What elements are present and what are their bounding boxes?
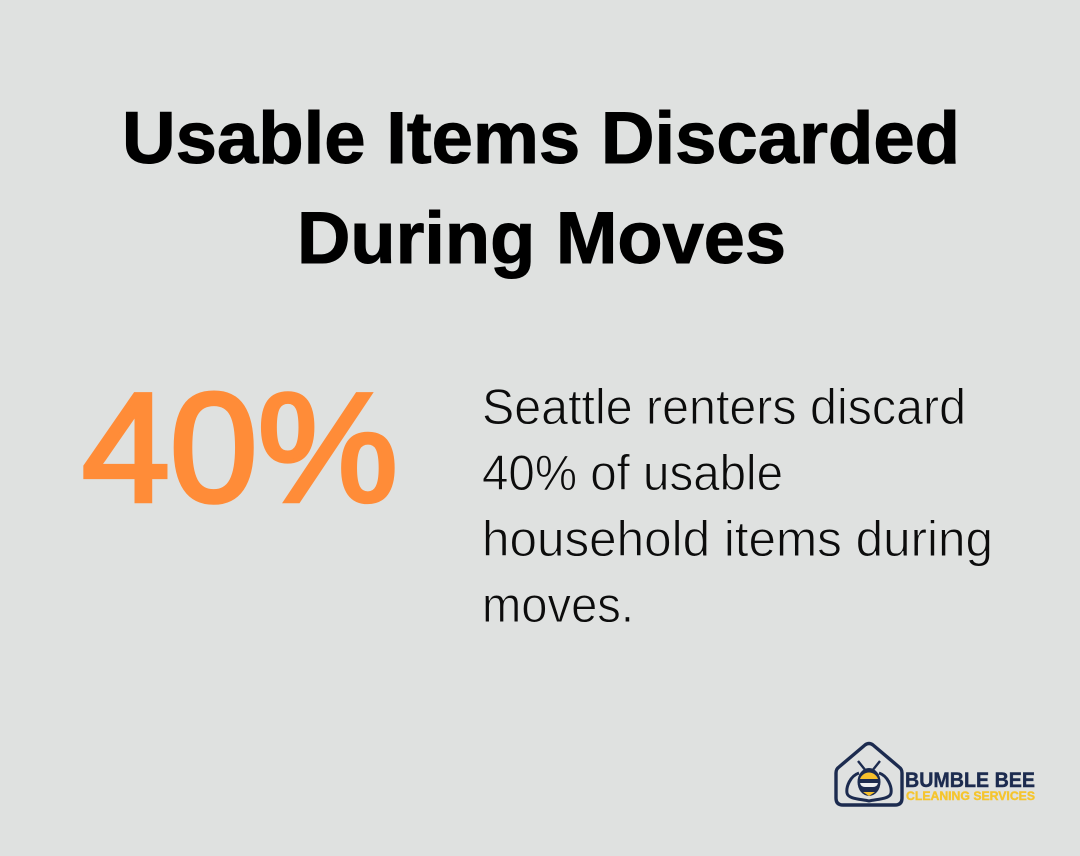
title: Usable Items Discarded xyxy=(122,98,960,179)
description text: moves. xyxy=(482,577,634,633)
logo wordmark: BUMBLE BEE xyxy=(905,769,1035,792)
title: During Moves xyxy=(297,198,786,279)
logo: Bumble Bee Cleaning Services xyxy=(836,744,1035,805)
description text: household items during xyxy=(482,511,993,567)
title xyxy=(122,98,960,279)
description text xyxy=(482,379,993,633)
logo tagline: CLEANING SERVICES xyxy=(906,789,1035,803)
statistic: 40%: 40% xyxy=(82,361,398,534)
description text: 40% of usable xyxy=(482,445,783,501)
description text: Seattle renters discard xyxy=(482,379,966,435)
icon: house with bee xyxy=(836,744,902,805)
